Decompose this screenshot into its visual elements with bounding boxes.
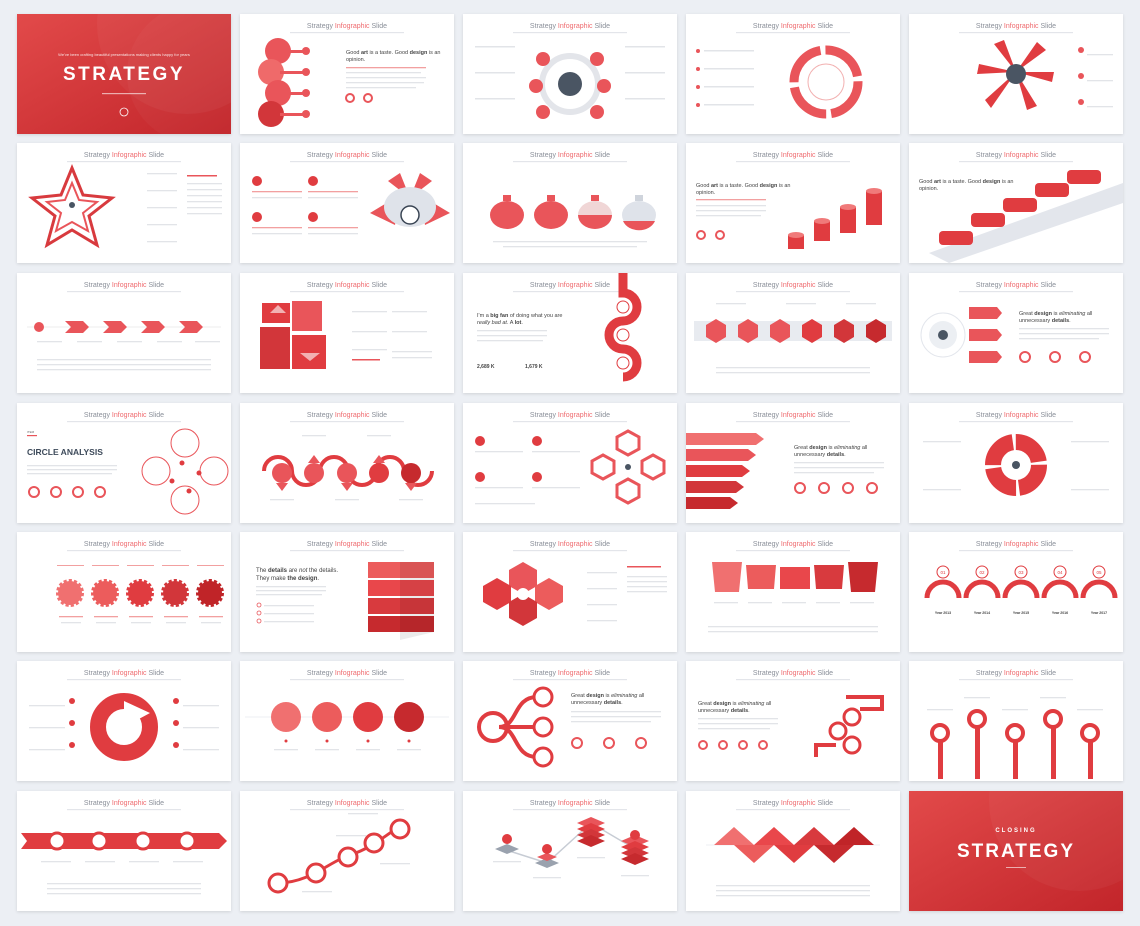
slide 25: numbered arcs: Year 2017 bbox=[1091, 611, 1107, 615]
slide 25: numbered arcs: Year 2014 bbox=[974, 611, 990, 615]
slide 27: four circles bbox=[240, 661, 454, 781]
slide 18: hexagon cluster bbox=[463, 403, 677, 523]
slide 24: trapezoids bbox=[686, 532, 900, 652]
slide 35: closing: CLOSING bbox=[995, 828, 1037, 834]
slide 6: star outline bbox=[17, 143, 231, 263]
slide 26: ring bbox=[17, 661, 231, 781]
slide 17: wave arrows bbox=[240, 403, 454, 523]
slide 9: cylinders: opinion. bbox=[696, 190, 716, 196]
slide 14: hexagons bbox=[686, 273, 900, 393]
slide 25: numbered arcs: 02 bbox=[979, 570, 985, 575]
slide 13: spiral: really bad at. A lot. bbox=[477, 320, 523, 326]
slide 1: title bbox=[17, 14, 231, 134]
slide 35: closing bbox=[909, 791, 1123, 911]
slide 25: numbered arcs: 04 bbox=[1057, 570, 1063, 575]
slide 12: arrow block bbox=[240, 273, 454, 393]
slide 8: bags bbox=[463, 143, 677, 263]
slide 10: stairs bbox=[909, 143, 1123, 263]
slide 19: stacked arrows bbox=[686, 403, 900, 523]
slide 16: circle analysis: CIRCLE ANALYSIS bbox=[27, 447, 103, 457]
slide 33: stacked layers bbox=[463, 791, 677, 911]
slide 13: spiral: I'm a big fan of doing what you are bbox=[477, 313, 562, 319]
slide 28: tree circles: Great design is eliminating all bbox=[571, 693, 644, 699]
slide 4: ring segments bbox=[686, 14, 900, 134]
slide 16: circle analysis bbox=[17, 403, 231, 523]
slide 22: stacked block: They make the design. bbox=[256, 576, 319, 582]
slide 28: tree circles: unnecessary details. bbox=[571, 700, 623, 706]
slide 16: circle analysis: ITEM bbox=[27, 430, 35, 434]
slide 15: circle with arrows: Great design is eliminating all bbox=[1019, 311, 1092, 317]
slide 9: cylinders: Good art is a taste. Good design is an bbox=[696, 183, 790, 189]
slide 1: title: STRATEGY bbox=[63, 64, 185, 85]
slide 11: arrows row bbox=[17, 273, 231, 393]
slide 19: stacked arrows: Great design is eliminating all bbox=[794, 445, 867, 451]
slide 2: stacked circles: opinion. bbox=[346, 57, 366, 63]
slide 1: title: We've been crafting beautiful presentations making clients happy for years bbox=[58, 52, 190, 57]
slide 9: cylinders bbox=[686, 143, 900, 263]
slide 3: hub circles bbox=[463, 14, 677, 134]
slide 23: hexagon flower bbox=[463, 532, 677, 652]
slide 10: stairs: opinion. bbox=[919, 186, 939, 192]
slide 13: spiral: 1,679 K bbox=[525, 364, 543, 370]
slide 28: tree circles bbox=[463, 661, 677, 781]
slide 15: circle with arrows bbox=[909, 273, 1123, 393]
slide 25: numbered arcs: 01 bbox=[940, 570, 946, 575]
slide 22: stacked block bbox=[240, 532, 454, 652]
slide 20: donut bbox=[909, 403, 1123, 523]
slide 25: numbered arcs: Year 2013 bbox=[935, 611, 951, 615]
slide 29: red connectors: Great design is eliminating all bbox=[698, 701, 771, 707]
slide 25: numbered arcs: Year 2016 bbox=[1052, 611, 1068, 615]
slide 25: numbered arcs: 05 bbox=[1096, 570, 1102, 575]
slide 25: numbered arcs: 03 bbox=[1018, 570, 1024, 575]
slide 21: gears bbox=[17, 532, 231, 652]
slide 31: ribbon bbox=[17, 791, 231, 911]
slide 22: stacked block: The details are not the details. bbox=[256, 568, 338, 574]
slide 25: numbered arcs: Year 2015 bbox=[1013, 611, 1029, 615]
slide 2: stacked circles: Good art is a taste. Good design is an bbox=[346, 50, 440, 56]
slide 35: closing: STRATEGY bbox=[957, 841, 1075, 862]
slide 30: pins bbox=[909, 661, 1123, 781]
slide 29: red connectors bbox=[686, 661, 900, 781]
slide 15: circle with arrows: unnecessary details. bbox=[1019, 318, 1071, 324]
slide 29: red connectors: unnecessary details. bbox=[698, 708, 750, 714]
slide 10: stairs: Good art is a taste. Good design is an bbox=[919, 179, 1013, 185]
slide 34: triangles bbox=[686, 791, 900, 911]
slide 25: numbered arcs bbox=[909, 532, 1123, 652]
slide 13: spiral bbox=[463, 273, 677, 393]
slide 2: stacked circles bbox=[240, 14, 454, 134]
slide 13: spiral: 2,689 K bbox=[477, 364, 495, 370]
slide 19: stacked arrows: unnecessary details. bbox=[794, 452, 846, 458]
slide 32: rising circles bbox=[240, 791, 454, 911]
slide 5: star arrows bbox=[909, 14, 1123, 134]
slide 7: analysis flower bbox=[240, 143, 454, 263]
